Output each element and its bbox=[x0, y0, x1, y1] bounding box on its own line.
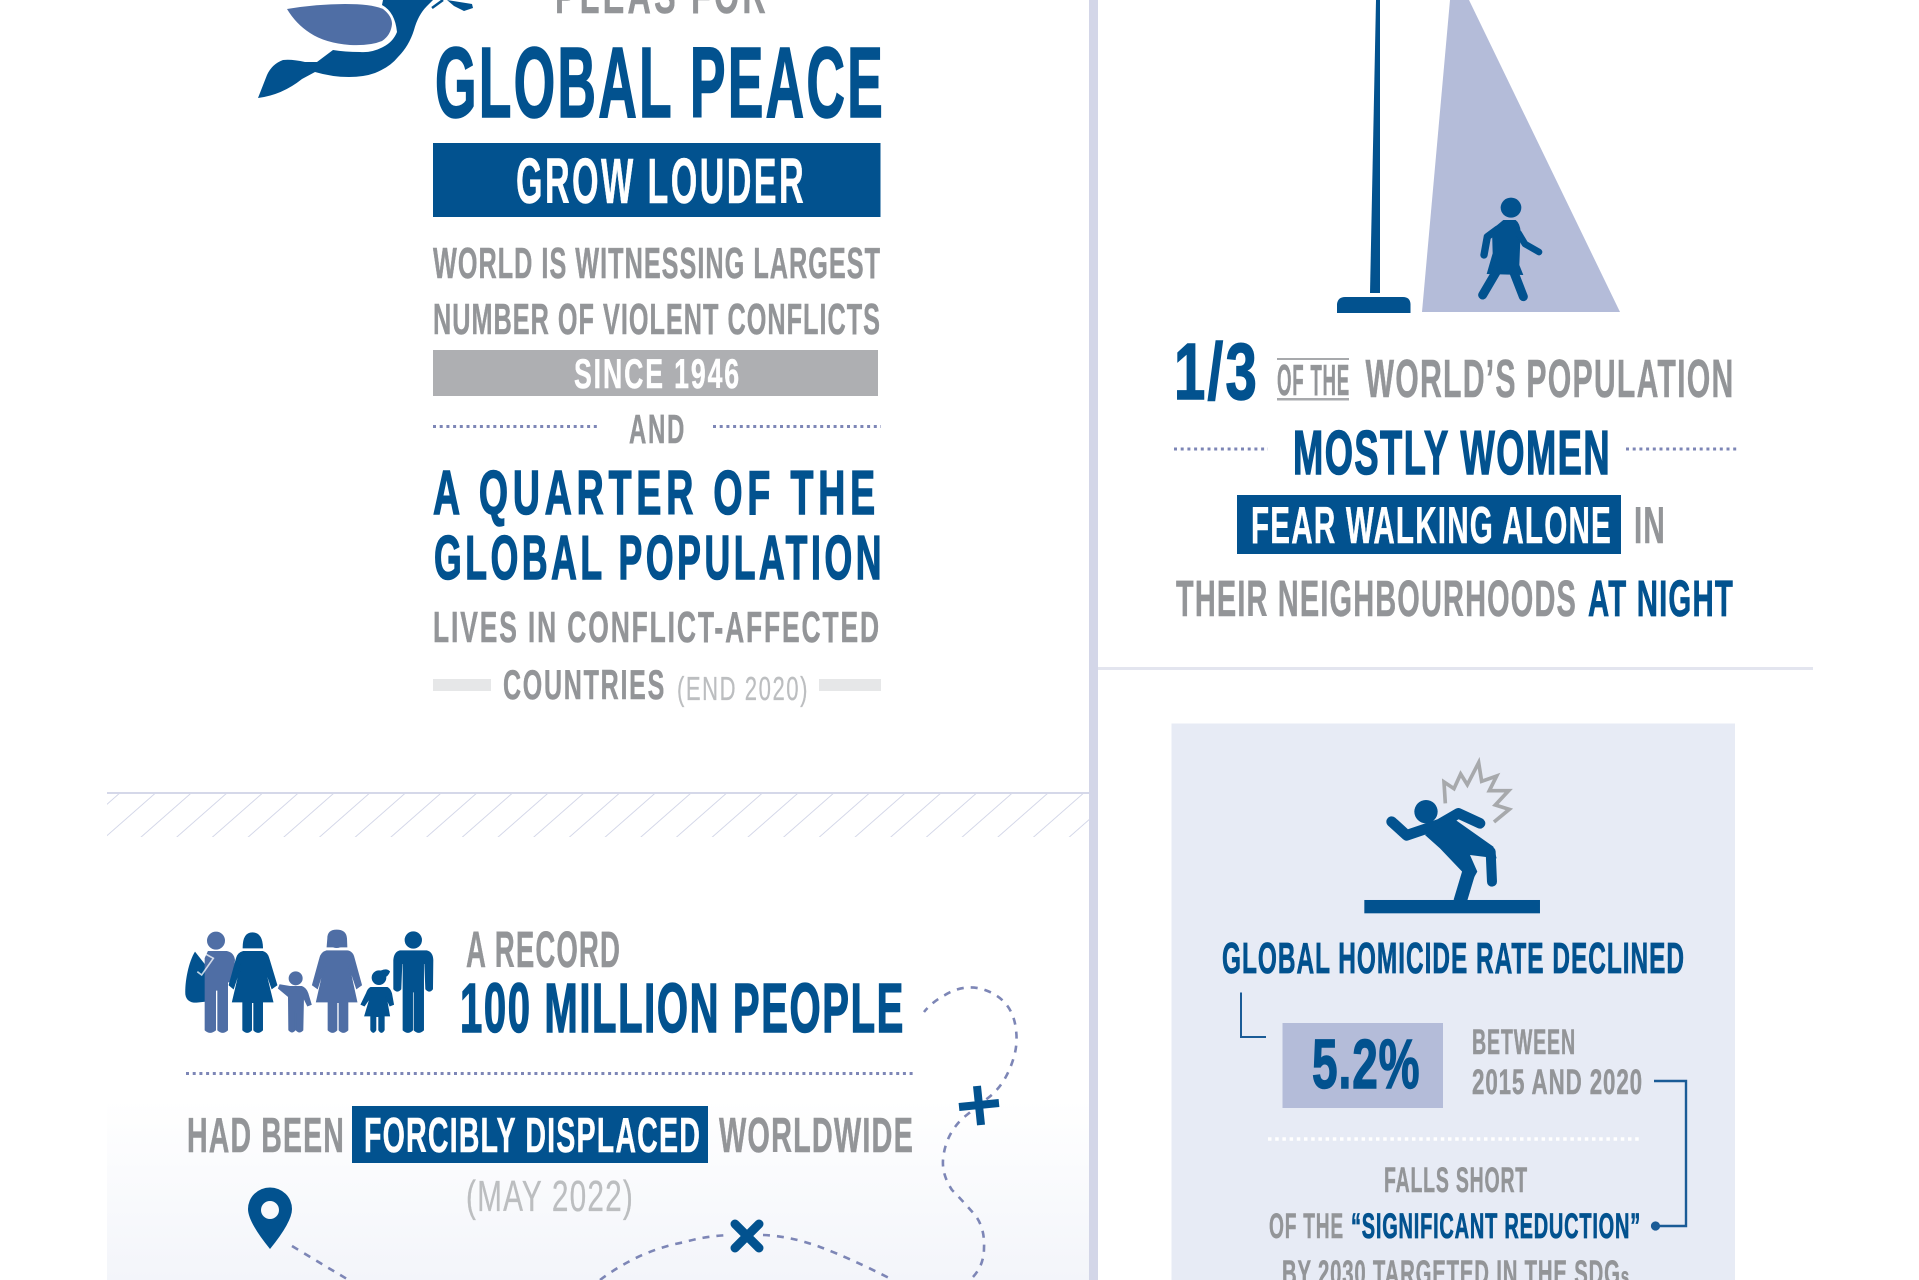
banner: fear walking alone: FEAR WALKING ALONE bbox=[1251, 497, 1612, 555]
connector: right bracket bbox=[1651, 1081, 1686, 1231]
text: global population: GLOBAL POPULATION bbox=[434, 523, 885, 593]
stat: 5.2 percent: 5.2% bbox=[1312, 1025, 1420, 1103]
icon: light cone bbox=[1422, 0, 1620, 312]
text: of the: OF THE bbox=[1269, 1207, 1344, 1246]
text: at night: AT NIGHT bbox=[1588, 570, 1734, 627]
text: worldwide: WORLDWIDE bbox=[719, 1108, 914, 1163]
text: a quarter of the: A QUARTER OF THE bbox=[433, 458, 880, 528]
text: number of violent conflicts: NUMBER OF VIOLENT CONFLICTS bbox=[433, 296, 881, 344]
route: dashed journey line bbox=[292, 987, 1017, 1280]
banner: forcibly displaced: FORCIBLY DISPLACED bbox=[364, 1108, 701, 1163]
heading: mostly women: MOSTLY WOMEN bbox=[1293, 418, 1611, 488]
connector: left bracket bbox=[1241, 992, 1266, 1037]
icon: street lamp bbox=[1337, 0, 1410, 313]
text: lives in conflict-affected: LIVES IN CONFLICT-AFFECTED bbox=[433, 604, 881, 652]
icon: falling figure bbox=[1364, 800, 1540, 913]
text: their neighbourhoods: THEIR NEIGHBOURHOODS bbox=[1176, 570, 1577, 627]
heading: global peace: GLOBAL PEACE bbox=[435, 27, 885, 139]
text: end 2020: (END 2020) bbox=[677, 670, 809, 707]
heading: 100 million people: 100 MILLION PEOPLE bbox=[460, 969, 905, 1047]
banner: fear walking alone bbox=[1237, 495, 1621, 555]
text: countries: COUNTRIES bbox=[503, 661, 666, 708]
icon: location pin bbox=[248, 1188, 292, 1249]
text: in: IN bbox=[1634, 497, 1666, 555]
icon: family group bbox=[185, 930, 433, 1032]
panel: fear walking alone: OF THE bbox=[1277, 356, 1350, 405]
icon: dove bbox=[258, 0, 473, 98]
banner: since 1946 bbox=[433, 350, 878, 397]
banner: grow louder: GROW LOUDER bbox=[516, 145, 806, 217]
stat: one third: 1/3 bbox=[1174, 327, 1259, 416]
text: and: AND bbox=[629, 406, 686, 452]
text: of the bbox=[1277, 356, 1350, 405]
text: between: BETWEEN bbox=[1472, 1023, 1576, 1062]
panel: global peace bbox=[258, 0, 885, 708]
text: significant reduction: “SIGNIFICANT REDUCTION” bbox=[1351, 1207, 1641, 1246]
stat: 5.2 percent bbox=[1282, 1023, 1443, 1108]
panel: fear walking alone bbox=[1174, 0, 1738, 627]
text: 2015 and 2020: 2015 AND 2020 bbox=[1472, 1063, 1643, 1102]
icon: x marker bbox=[735, 1224, 759, 1248]
icon: walking woman bbox=[1483, 198, 1539, 297]
text: falls short: FALLS SHORT bbox=[1384, 1161, 1528, 1200]
panel: homicide rate bbox=[1172, 724, 1735, 1280]
text: world is witnessing: WORLD IS WITNESSING LARGEST bbox=[433, 240, 881, 288]
text: a record: A RECORD bbox=[466, 921, 621, 978]
text: had been: HAD BEEN bbox=[187, 1108, 345, 1163]
banner: grow louder bbox=[433, 143, 880, 217]
banner: since 1946: SINCE 1946 bbox=[574, 350, 741, 397]
icon: plus marker bbox=[959, 1086, 999, 1125]
panel: displacement bbox=[185, 921, 1017, 1280]
icon: impact burst bbox=[1444, 763, 1509, 822]
banner: forcibly displaced bbox=[352, 1106, 708, 1163]
text: may 2022: (MAY 2022) bbox=[466, 1172, 634, 1221]
